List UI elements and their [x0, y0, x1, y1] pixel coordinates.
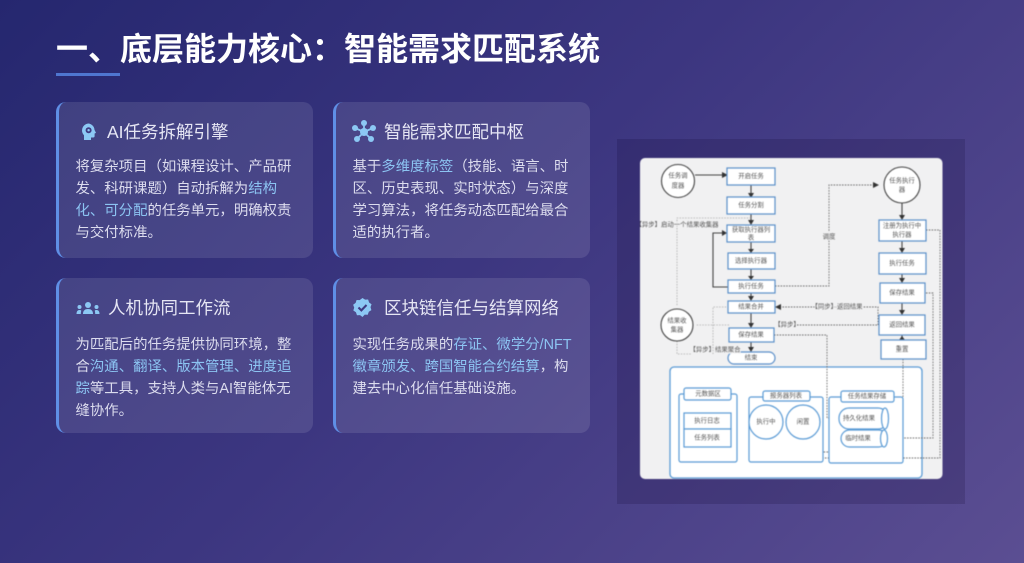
- solid flow connectors: [695, 175, 902, 350]
- card body text: 徽章颁发、跨国智能合约结算，构: [352, 359, 568, 375]
- actor circles: [661, 164, 920, 341]
- icon: head with gear: [82, 124, 96, 140]
- card heading: 人机协同工作流: [108, 298, 230, 318]
- light connectors: [677, 218, 751, 354]
- diagram labels: 器: [899, 186, 906, 194]
- card body text: [352, 336, 572, 397]
- diagram labels: 任务结果存储: [848, 391, 887, 400]
- dotted flow connectors: [766, 185, 940, 458]
- diagram labels: 执行任务: [738, 281, 764, 290]
- card body text: 合沟通、翻译、版本管理、进度追: [76, 359, 291, 375]
- diagram labels: 调度: [823, 232, 836, 240]
- diagram labels: 选择执行器: [735, 256, 768, 264]
- panel: smart matching hub: [333, 102, 590, 258]
- diagram labels: 任务执行: [889, 176, 915, 184]
- card body text: 基于多维度标签（技能、语言、时: [352, 159, 568, 175]
- icon: people group: [76, 302, 100, 314]
- card body text: 发、科研课题）自动拆解为结构: [76, 181, 277, 197]
- diagram sheet: [640, 158, 942, 479]
- panel: blockchain trust and settlement: [333, 278, 590, 433]
- process boxes: [727, 168, 926, 364]
- card body text: 适的执行者。: [352, 225, 439, 241]
- diagram labels: 任务列表: [694, 432, 720, 442]
- card body text: [76, 158, 291, 241]
- card body text: 化、可分配的任务单元，明确权责: [76, 203, 291, 219]
- diagram labels: 任务分割: [738, 200, 764, 209]
- storage container: [670, 367, 922, 478]
- card body text: 缝协作。: [76, 403, 133, 419]
- diagram labels: 【异步】: [774, 320, 800, 328]
- diagram labels: 开启任务: [738, 171, 764, 180]
- diagram labels: 注册为执行中: [883, 220, 921, 230]
- diagram labels: 重置: [896, 345, 909, 353]
- diagram labels: 保存结果: [889, 288, 915, 296]
- diagram labels: 结果收: [667, 316, 687, 324]
- storage groups: [679, 388, 903, 463]
- title: 一、底层能力核心：智能需求匹配系统: [56, 31, 600, 67]
- flowchart diagram: [639, 157, 944, 480]
- diagram labels: 结束: [745, 352, 758, 362]
- diagram labels: 保存结果: [738, 330, 764, 338]
- diagram labels: 集器: [671, 324, 684, 334]
- diagram labels: 返回结果: [889, 320, 915, 328]
- diagram labels: 任务调: [668, 170, 688, 180]
- card body text: 实现任务成果的存证、微学分/NFT: [352, 337, 572, 353]
- card body text: 与交付标准。: [76, 225, 162, 241]
- icon: verified badge: [353, 298, 372, 317]
- card body text: [352, 158, 568, 241]
- diagram labels: 报务器列表: [770, 390, 803, 400]
- title underline: [56, 73, 120, 76]
- diagram labels: 【同步】返回结果: [811, 302, 863, 310]
- arrowheads: [722, 172, 905, 445]
- card heading: 区块链信任与结算网络: [384, 298, 559, 318]
- icon: network nodes: [352, 120, 376, 142]
- panel: flowchart backdrop: [617, 139, 965, 504]
- diagram labels: 获取执行器列: [732, 224, 770, 234]
- panel: human-machine workflow: [56, 278, 313, 433]
- card body text: 为匹配后的任务提供协同环境，整: [76, 337, 291, 353]
- diagram labels: 度器: [672, 180, 685, 190]
- diagram labels: 持久化结果: [843, 413, 876, 422]
- diagram labels: 执行中: [756, 416, 776, 426]
- diagram labels: 执行器: [892, 230, 912, 238]
- card heading: 智能需求匹配中枢: [384, 122, 524, 142]
- diagram labels: 执行任务: [889, 258, 915, 267]
- card body text: 建去中心化信任基础设施。: [352, 381, 525, 397]
- diagram labels: 闲置: [797, 416, 810, 426]
- diagram labels: 【异步】结果聚合: [689, 344, 741, 354]
- card heading: AI任务拆解引擎: [107, 122, 229, 142]
- card body text: 将复杂项目（如课程设计、产品研: [76, 159, 291, 175]
- diagram labels: 临时结果: [845, 433, 871, 442]
- diagram labels: 执行日志: [694, 416, 720, 424]
- diagram labels: 结果合并: [738, 302, 764, 310]
- diagram labels: [635, 170, 921, 442]
- card body text: 区、历史表现、实时状态）与深度: [352, 181, 568, 197]
- diagram labels: 元数据区: [695, 388, 721, 398]
- panel: AI task decomposition: [56, 102, 313, 258]
- card body text: 学习算法，将任务动态匹配给最合: [352, 203, 568, 219]
- diagram labels: 表: [748, 232, 755, 242]
- card body text: [76, 336, 291, 419]
- card body text: 踪等工具，支持人类与AI智能体无: [76, 381, 291, 397]
